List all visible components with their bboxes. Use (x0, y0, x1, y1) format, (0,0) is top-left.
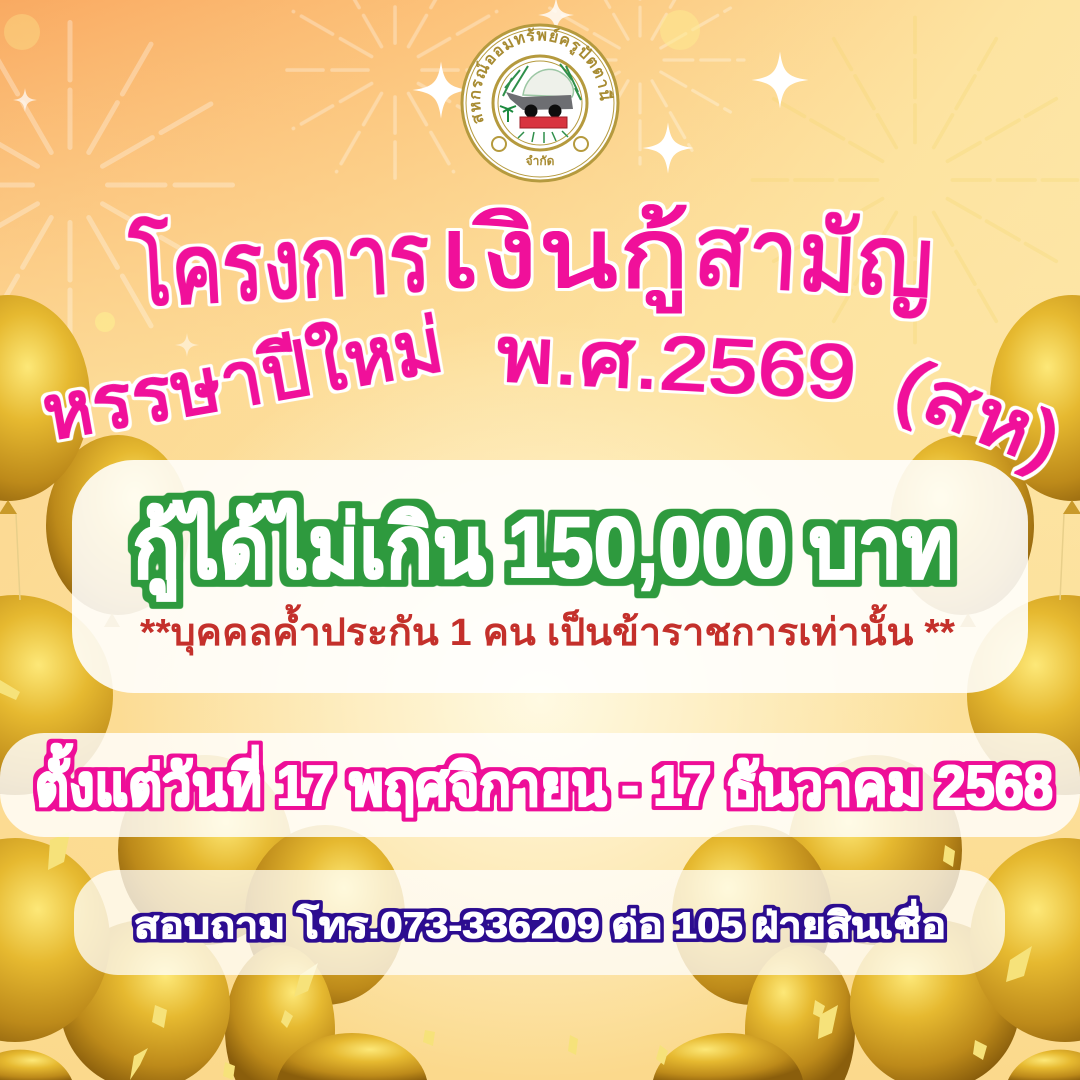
title line 1 (127, 195, 936, 327)
confetti (0, 680, 1032, 1080)
panel: loan limit (72, 460, 1028, 693)
logo: rays (518, 131, 568, 143)
balloons: left cluster (0, 295, 427, 1080)
logo: cooperative seal: สหกรณ์ออมทรัพย์ครูปัตตานี (470, 28, 614, 124)
fireworks (0, 0, 1078, 347)
logo: right emblem (574, 137, 588, 151)
title line 2 (36, 302, 1073, 484)
title word: loan: เงินกู้ (440, 198, 690, 313)
logo: mountain (523, 69, 573, 97)
subtitle: year: พ.ศ.2569 (494, 312, 858, 416)
sparkles (4, 0, 808, 357)
logo: curved name (480, 40, 600, 122)
text: contact phone: สอบถาม โทร.073-336209 ต่อ 105 ฝ่ายสินเชื่อ (134, 899, 946, 946)
title word: project: โครงการ (127, 201, 433, 327)
logo: right wheel (548, 104, 562, 118)
subtitle: type: (สห) (884, 342, 1073, 484)
logo: limited text: จำกัด (526, 154, 555, 168)
heading: loan amount: กู้ได้ไม่เกิน 150,000 บาท (133, 498, 953, 601)
logo: hill hatching (503, 64, 581, 100)
panel: contact (74, 870, 1005, 975)
logo: red base (520, 117, 567, 128)
note: guarantor: **บุคคลค้ำประกัน 1 คน เป็นข้าราชการเท่านั้น ** (140, 604, 955, 656)
panel: dates (0, 733, 1080, 837)
logo: palm tree (500, 106, 516, 122)
logo: cooperative seal (460, 24, 620, 182)
logo: left emblem (492, 137, 506, 151)
subtitle: new year: หรรษาปีใหม่ (36, 302, 450, 457)
title word: ordinary: สามัญ (691, 195, 936, 320)
balloons: right cluster (653, 295, 1080, 1080)
logo: cannon (506, 92, 573, 110)
logo: left wheel (524, 104, 538, 118)
